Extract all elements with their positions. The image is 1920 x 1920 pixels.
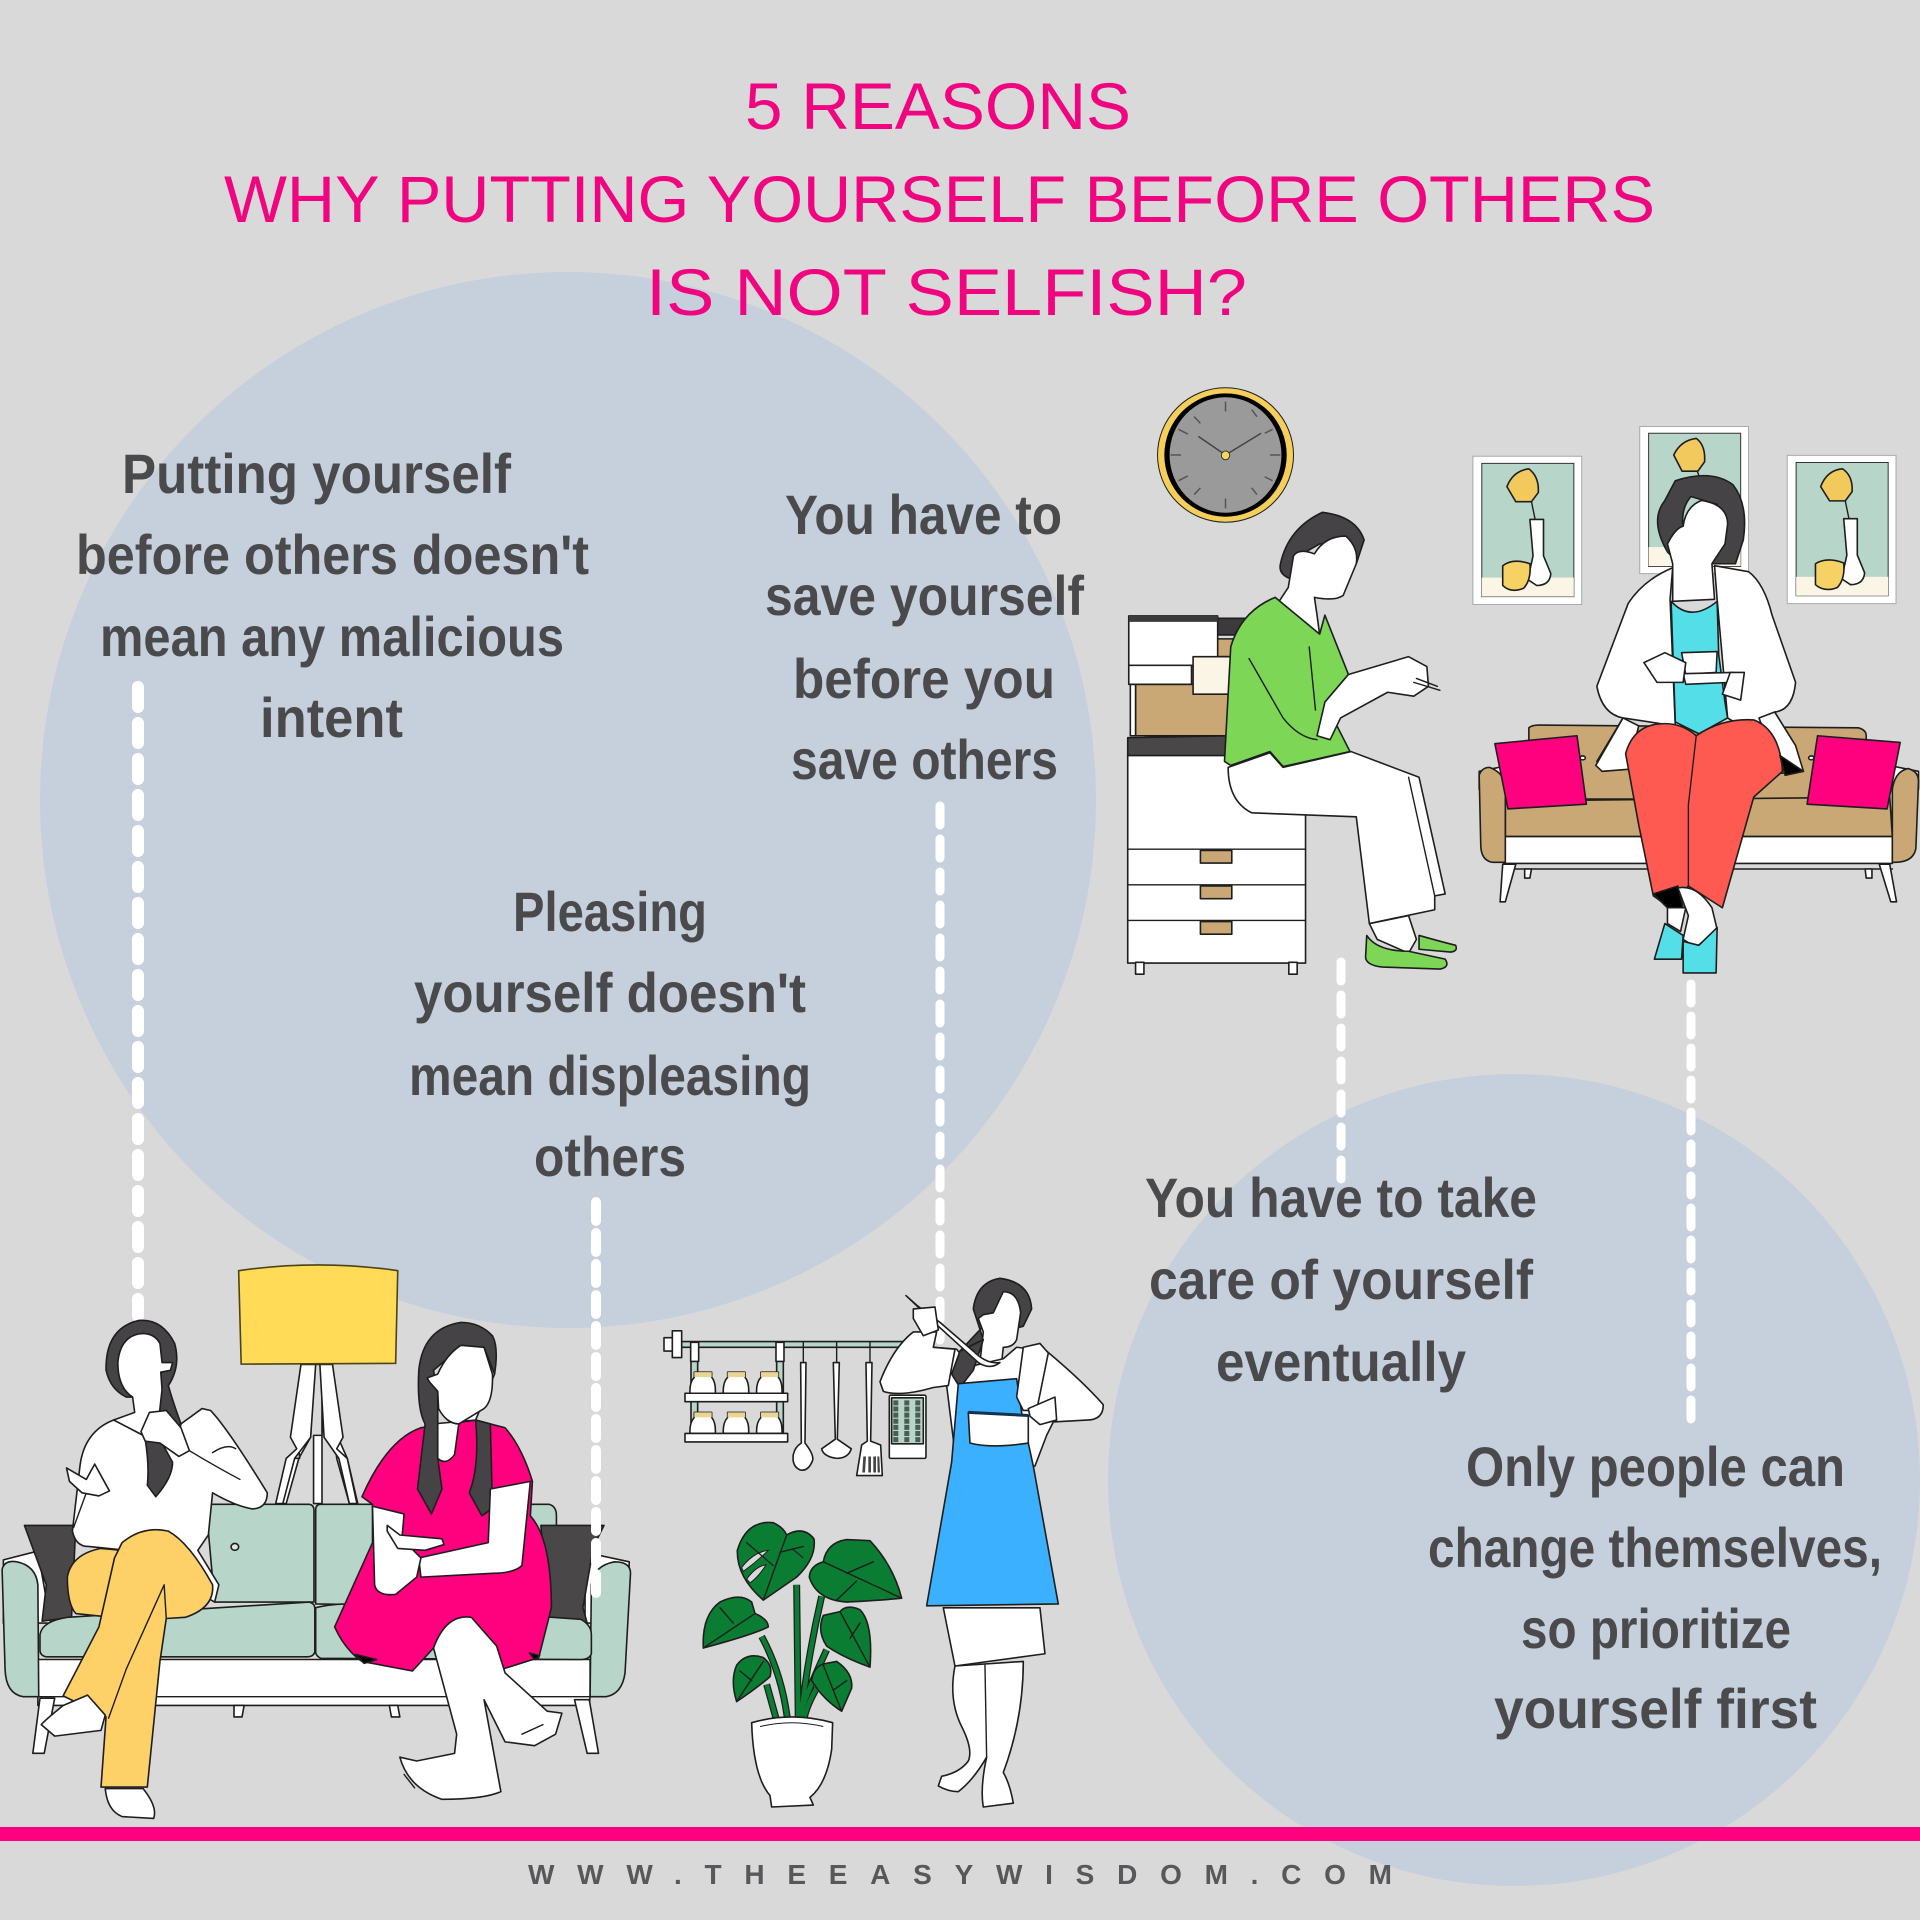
text block: reason 5: yourself first [1494,1677,1817,1740]
text block: reason 3: save yourself [765,564,1084,627]
title [224,69,1655,329]
text block: reason 4 [1145,1166,1537,1393]
dotted connector: reason 4 [1336,962,1346,1182]
dotted connector: reason 1 [132,687,144,1316]
title: 5 REASONS [745,69,1131,143]
illustration: kitchen with plant and cooking woman [664,1278,1103,1807]
text block: reason 3: You have to [785,483,1062,546]
woman tasting with blue apron [880,1278,1103,1807]
woman with white shirt and yellow trousers [41,1320,267,1818]
text block: reason 5 [1428,1435,1882,1740]
text block: reason 4: care of yourself [1149,1248,1533,1311]
pink footer bar [0,1827,1920,1841]
footer website text: WWW.THEEASYWISDOM.COM [528,1859,1392,1890]
text block: reason 3: before you [793,647,1055,710]
text block: reason 2: others [534,1125,686,1188]
text block: reason 1: mean any malicious [100,605,564,668]
text block: reason 2: Pleasing [513,880,707,943]
plant in pot [703,1522,902,1807]
text block: reason 2: yourself doesn't [414,961,806,1024]
text block: reason 2: mean displeasing [409,1044,811,1107]
background circle: upper left [40,272,1096,1328]
sofa [2,1504,631,1753]
framed pictures [1473,427,1896,604]
illustration: copier, clock, frames and two women [1128,388,1918,974]
tan sofa [1479,725,1918,902]
illustration: two women on mint sofa [2,1265,631,1818]
kitchen rail with jars and utensils [664,1331,926,1476]
title: IS NOT SELFISH? [646,255,1247,329]
wall clock [1158,388,1294,522]
woman with red trousers holding cup [1596,476,1803,973]
text block: reason 4: You have to take [1145,1166,1537,1229]
dotted connector: reason 3 [936,806,944,1340]
text block: reason 1: Putting yourself [122,442,511,505]
text block: reason 3 [765,483,1084,791]
woman in green top sitting on copier [1224,512,1456,969]
lamp [239,1265,398,1504]
dotted connector: reason 5 [1686,984,1696,1432]
text block: reason 2 [409,880,811,1188]
text block: reason 4: eventually [1216,1330,1466,1393]
text block: reason 3: save others [791,728,1058,791]
text block: reason 1: intent [260,686,403,749]
woman with pink dress and braids [335,1322,562,1799]
background circle: lower right [1108,1074,1920,1886]
text block: reason 1: before others doesn't [76,523,589,586]
title: WHY PUTTING YOURSELF BEFORE OTHERS [224,162,1655,236]
text block: reason 1 [76,442,589,749]
copier [1128,616,1306,974]
text block: reason 5: Only people can [1466,1435,1845,1498]
dotted connector: reason 2 [591,1202,601,1604]
text block: reason 5: so prioritize [1521,1597,1791,1660]
